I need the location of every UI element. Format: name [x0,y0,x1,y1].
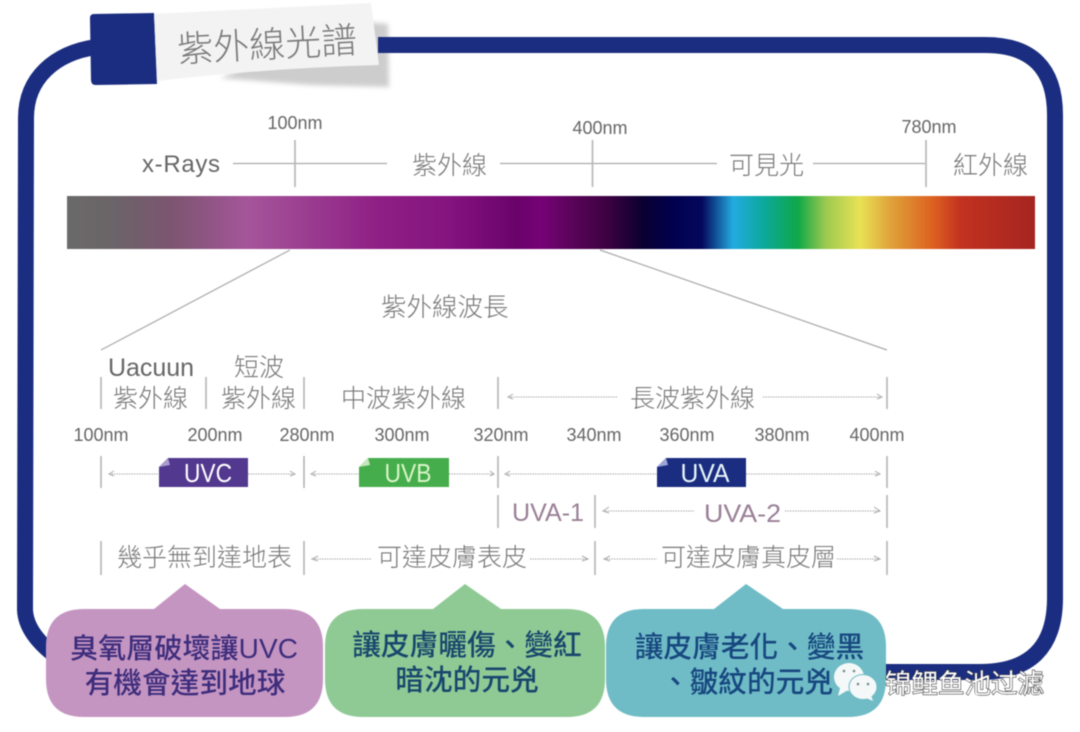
label: UVA-2: UVA-2 [704,500,781,528]
label: UVA-1: UVA-1 [512,499,584,527]
spectrum scale labels [142,113,1028,187]
nm scale row: 360nm [659,425,715,445]
ticks [498,495,887,528]
callout: UVA: 、皺紋的元兇 [661,667,833,699]
navy tab block [90,13,157,85]
tag: UVB: UVB [384,458,432,488]
tag: UVB [359,458,449,488]
label: reaches dermis: 可達皮膚真皮層 [661,544,836,572]
zoom cone lines [101,250,887,350]
spectrum gradient bar [67,196,1035,249]
label: 400nm: 400nm [572,118,628,138]
nm labels: 100nm [73,425,129,445]
icon: chat bubbles [834,663,877,701]
label: reaches epidermis: 可達皮膚表皮 [377,544,527,572]
scale lines [233,162,925,164]
label: short wave UV: 紫外線 [221,385,296,413]
heading: UV wavelengths: 紫外線波長 [381,294,509,322]
label: short wave: 短波 [234,354,284,382]
UVA sub-band row [498,495,887,528]
penetration row [101,541,887,575]
nm scale row: 340nm [566,425,622,445]
label: infrared: 紅外線 [953,152,1028,180]
tag: UVC: UVC [184,458,232,488]
watermark text: 锦鲤鱼池过滤 [885,669,1044,699]
UV type row [101,456,887,488]
title tab [90,3,379,85]
tag: UVA: UVA [680,458,730,488]
nm scale row: 280nm [279,425,335,445]
label: ultraviolet: 紫外線 [412,152,487,180]
ticks [101,377,887,409]
label: x-rays: x-Rays [142,151,220,178]
label: long wave UV: 長波紫外線 [630,385,755,413]
callout: UVB [325,584,605,717]
nm scale row [73,425,905,445]
long wave arrows [508,396,882,398]
band name row [101,354,887,413]
label: barely reaches surface: 幾乎無到達地表 [117,544,292,572]
label: 780nm: 780nm [901,117,957,137]
nm scale row: 400nm [849,425,905,445]
callout: UVA: 讓皮膚老化、變黑 [635,632,864,664]
nm scale row: 300nm [374,425,430,445]
label: 100nm: 100nm [267,113,323,133]
nm scale row: 320nm [473,425,529,445]
dotted arrows [109,473,880,475]
scale ticks [295,140,926,187]
callout: UVB: 讓皮膚曬傷、變紅 [352,630,582,662]
label: medium wave UV: 中波紫外線 [341,385,466,413]
label: visible light: 可見光 [729,152,804,180]
arrows [312,558,880,560]
tab shadow [220,22,389,87]
ticks [101,541,887,575]
title text: 紫外線光譜 [176,20,358,70]
callout: UVC: 臭氧層破壞讓UVC [70,633,298,664]
tag: UVA [657,458,746,488]
label: vacuum: Uacuun [108,354,194,382]
label: vacuum UV: 紫外線 [113,385,188,413]
callout: UVA [606,584,886,717]
nm scale row: 380nm [754,425,810,445]
ticks [101,456,887,488]
watermark [834,663,1044,701]
callout: UVB: 暗沈的元兇 [395,665,539,697]
nm scale row: 200nm [187,425,243,445]
white label paper [154,3,379,81]
arrows [603,510,880,512]
tag: UVC [159,458,248,488]
callout: UVC [46,584,323,717]
callout: UVC: 有機會達到地球 [85,668,286,700]
